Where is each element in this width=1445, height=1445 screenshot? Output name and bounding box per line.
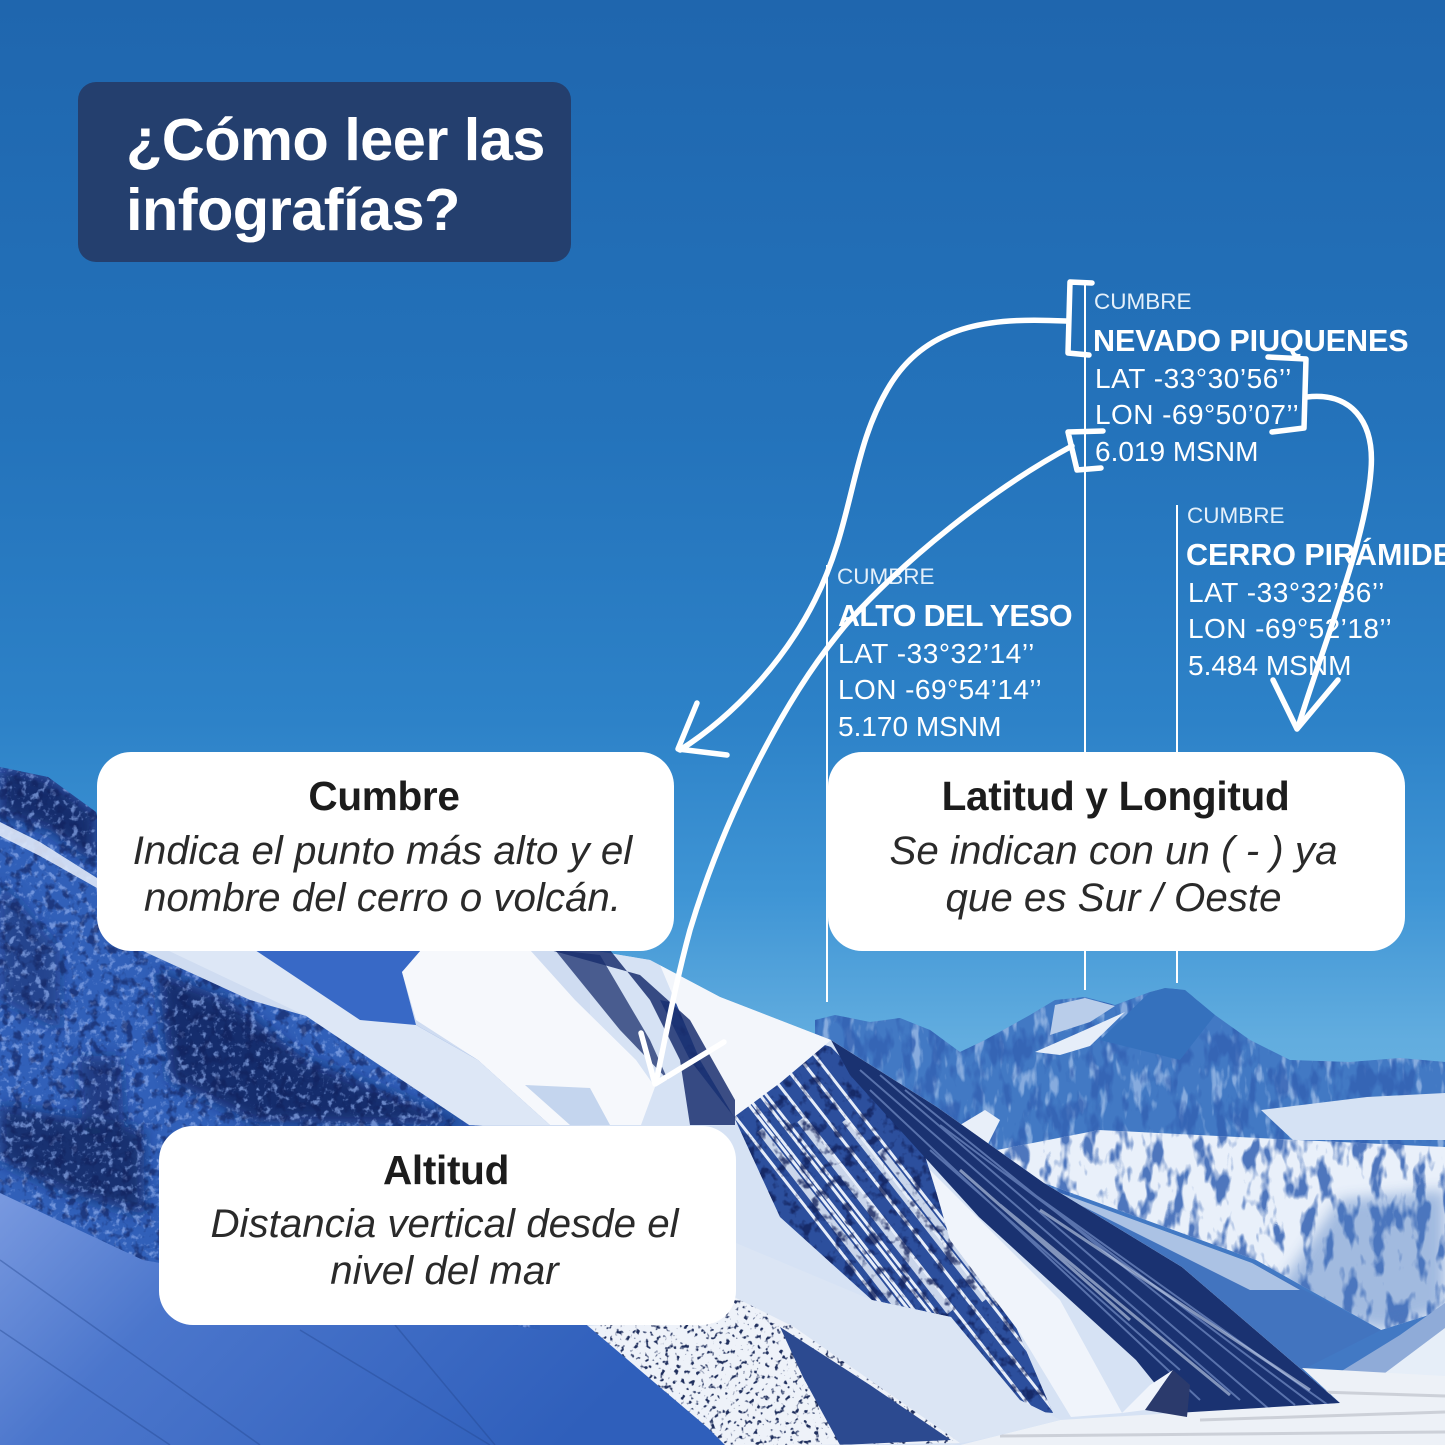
arrow: cumbre to card <box>680 320 1066 750</box>
card: Cumbre: Indica el punto más alto y el <box>133 828 632 873</box>
peak label: Cerro Pirámide: CUMBRE <box>1187 503 1285 528</box>
vertical guide line: Cerro Pirámide <box>1176 505 1178 983</box>
peak label: Alto del Yeso <box>837 564 1072 742</box>
sunlit foreground hill <box>588 1290 968 1445</box>
card: Cumbre <box>97 752 674 951</box>
card: Cumbre: nombre del cerro o volcán. <box>144 875 621 920</box>
peak label: Nevado Piuquenes <box>1093 289 1409 467</box>
vertical guide line: Alto del Yeso <box>826 565 828 1002</box>
card: Altitud <box>159 1126 736 1325</box>
bracket: lat lon <box>1268 357 1306 432</box>
small rock outcrop <box>1145 1370 1190 1417</box>
right foreground hill <box>1340 1303 1445 1378</box>
terrain base under all foreground slopes <box>0 767 1060 1445</box>
card: Latitud y Longitud: Se indican con un ( - ) ya <box>890 828 1337 873</box>
vertical guide line: Nevado Piuquenes <box>1084 282 1086 990</box>
peak label: Nevado Piuquenes: 6.019 MSNM <box>1095 436 1258 467</box>
arrow: lat lon to card <box>1298 396 1371 727</box>
peak label: Alto del Yeso: ALTO DEL YESO <box>838 599 1072 633</box>
valley floor <box>950 1368 1445 1445</box>
peak label: Cerro Pirámide <box>1186 503 1445 681</box>
peak label: Cerro Pirámide: LAT -33°32’36’’ <box>1188 577 1385 608</box>
peak label: Nevado Piuquenes: LON -69°50’07’’ <box>1095 399 1299 430</box>
title box: infografías? <box>126 176 460 243</box>
left dark mountain slope <box>0 1185 725 1445</box>
peak label: Alto del Yeso: CUMBRE <box>837 564 935 589</box>
peak label: Cerro Pirámide: 5.484 MSNM <box>1188 650 1351 681</box>
card: Latitud y Longitud <box>828 752 1405 951</box>
card: Altitud: Distancia vertical desde el <box>210 1201 679 1246</box>
snow band and bright snowfield <box>240 950 550 1125</box>
peak label: Alto del Yeso: 5.170 MSNM <box>838 711 1001 742</box>
snowy mid range <box>998 1130 1445 1330</box>
peak label: Cerro Pirámide: LON -69°52’18’’ <box>1188 613 1392 644</box>
arrow: altitud to card <box>656 446 1072 1082</box>
far mountain range <box>815 985 1445 1445</box>
title box: ¿Cómo leer las <box>126 106 545 173</box>
peak label: Nevado Piuquenes: LAT -33°30’56’’ <box>1095 363 1292 394</box>
peak label: Nevado Piuquenes: NEVADO PIUQUENES <box>1093 324 1409 358</box>
card: Altitud: nivel del mar <box>330 1248 559 1293</box>
dark rock ridge by summit <box>550 950 735 1125</box>
bracket: altitud <box>1068 431 1103 470</box>
peak label: Nevado Piuquenes: CUMBRE <box>1094 289 1192 314</box>
title box <box>78 82 571 262</box>
arrowhead: altitud <box>641 1033 724 1084</box>
card: Cumbre: Cumbre <box>308 773 460 819</box>
main right ridge <box>590 950 1350 1445</box>
peak label: Alto del Yeso: LON -69°54’14’’ <box>838 674 1042 705</box>
card: Latitud y Longitud: que es Sur / Oeste <box>946 875 1282 920</box>
valley slope <box>1044 1187 1381 1370</box>
card: Altitud: Altitud <box>383 1147 509 1193</box>
bracket: cumbre <box>1068 282 1092 355</box>
arrowhead: lat lon <box>1273 680 1338 729</box>
card: Latitud y Longitud: Latitud y Longitud <box>942 773 1289 819</box>
arrowhead: cumbre <box>678 703 727 755</box>
peak label: Alto del Yeso: LAT -33°32’14’’ <box>838 638 1035 669</box>
